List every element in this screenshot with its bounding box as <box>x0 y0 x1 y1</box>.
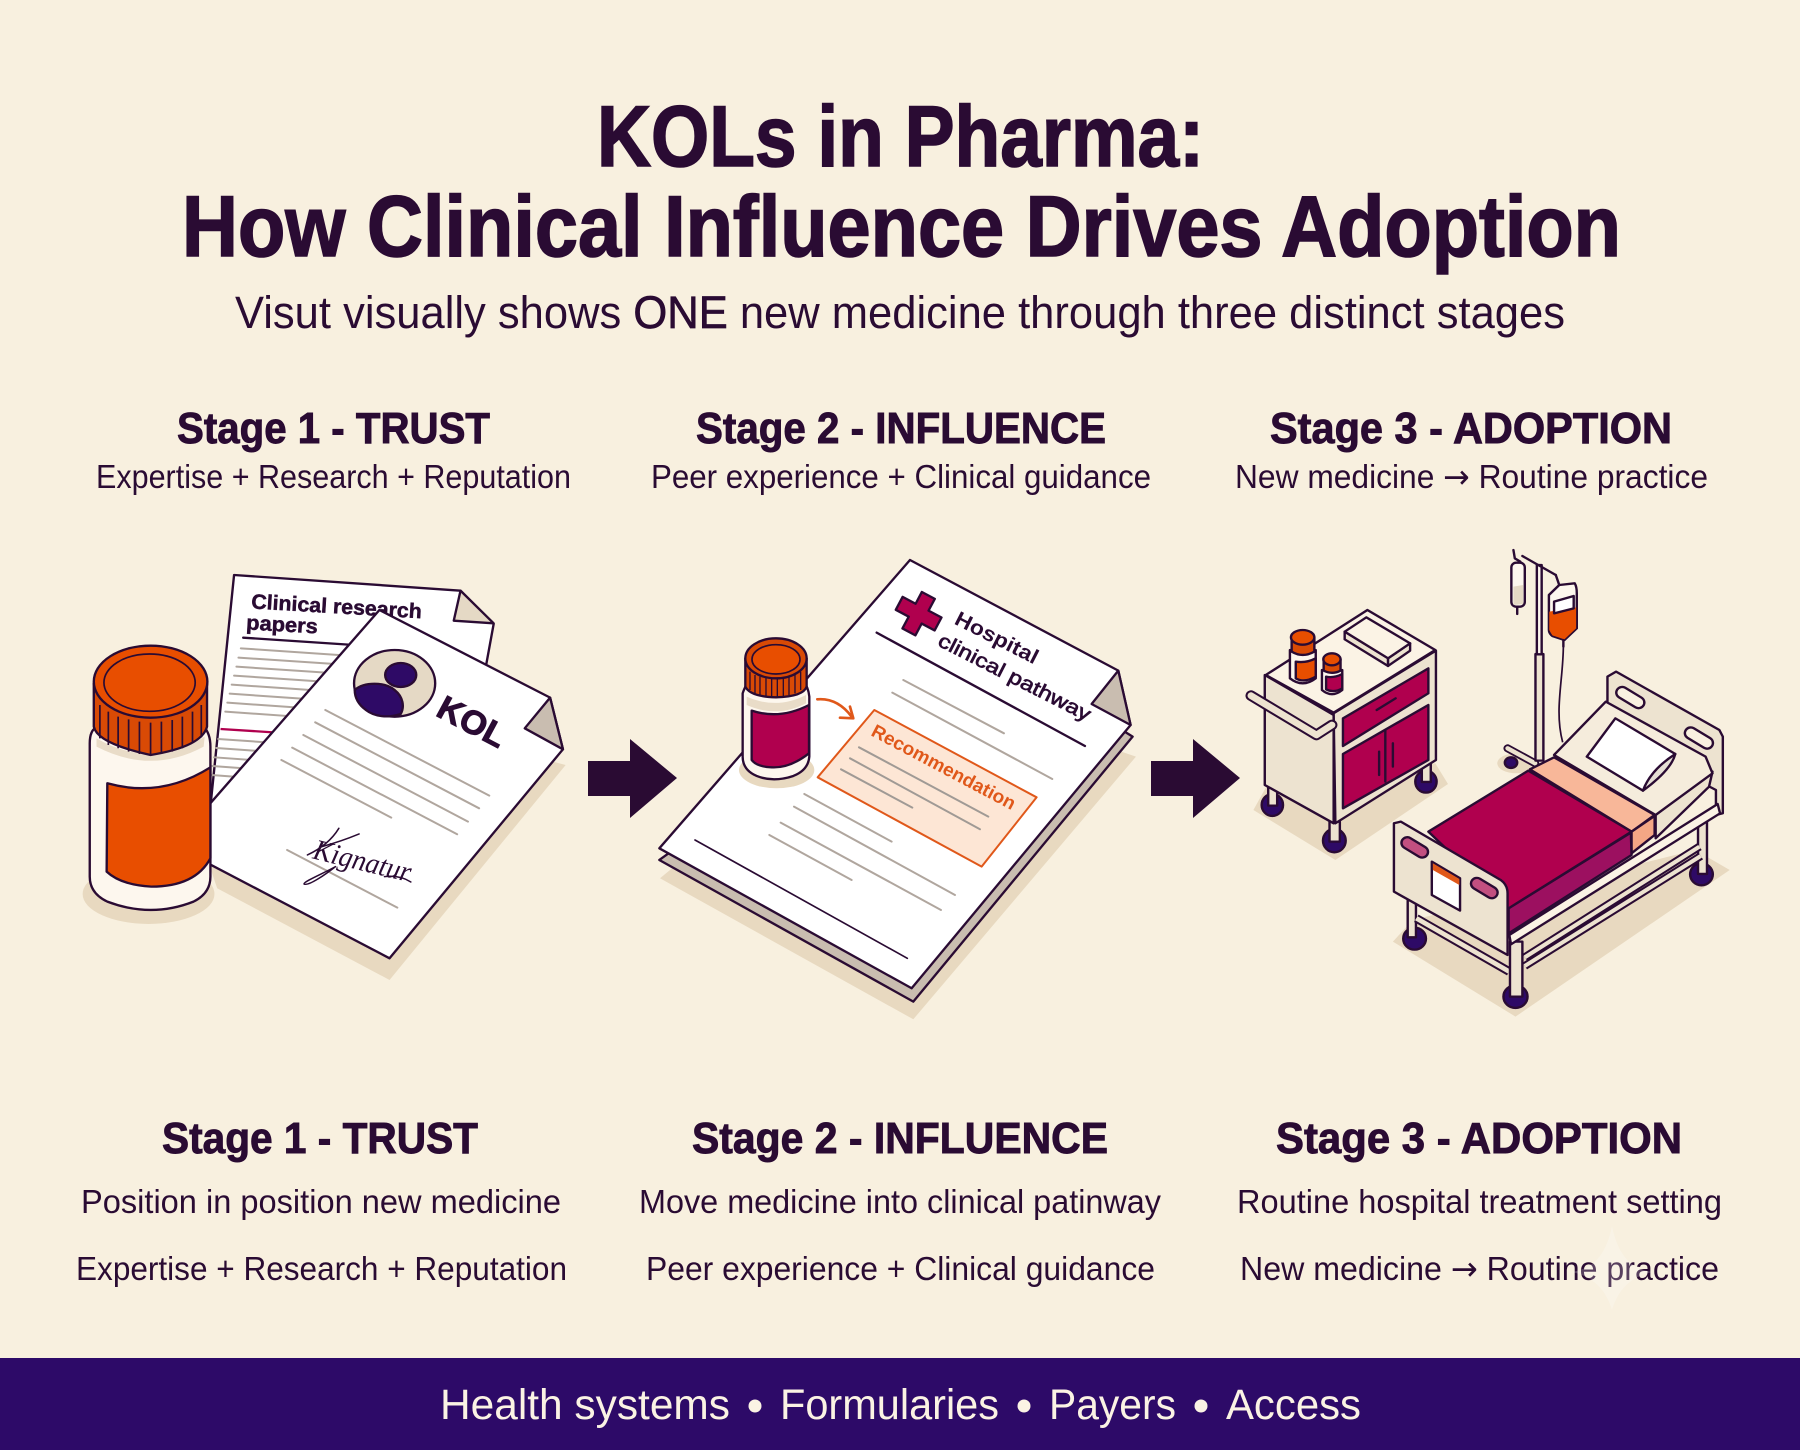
signature: Kignatur <box>309 834 415 889</box>
bottom text: stage 3: Stage 3 - ADOPTION <box>1276 1114 1682 1163</box>
medicine cart <box>1251 610 1448 860</box>
magenta blanket <box>1428 771 1632 933</box>
footer band: Health systems <box>440 1381 730 1429</box>
backrest support <box>1656 772 1712 838</box>
hospital bed <box>1393 672 1730 1017</box>
pillow <box>1587 718 1675 791</box>
top heading: stage 3: New medicine → Routine practice <box>1235 457 1708 496</box>
bottom text: stage 3 <box>1237 1114 1722 1288</box>
orange cart bottle <box>1290 630 1316 683</box>
bed shadow <box>1393 850 1730 1017</box>
illustration: stage 3 hospital ward <box>1251 550 1730 1017</box>
arrow: stage 2 to stage 3 <box>1151 739 1240 818</box>
icon: medical cross <box>890 585 948 642</box>
headboard <box>1607 672 1723 815</box>
top heading: stage 1 <box>96 404 571 495</box>
top heading: stage 1: Expertise + Research + Reputation <box>96 458 571 495</box>
bed frame rail <box>1509 804 1720 944</box>
clinical research paper <box>210 575 494 807</box>
chart card <box>1432 862 1460 911</box>
title: KOLs in Pharma: <box>597 89 1204 185</box>
IV stand <box>1497 550 1577 773</box>
IV bag: clear <box>1511 563 1525 614</box>
top heading: stage 2: Peer experience + Clinical guidance <box>651 458 1151 495</box>
arrow: into recommendation <box>817 699 853 718</box>
KOL document <box>174 610 563 958</box>
cart wheels <box>1262 757 1437 852</box>
top heading: stage 3 <box>1235 404 1708 496</box>
footer band <box>0 1358 1800 1450</box>
illustration: stage 2 hospital clinical pathway <box>659 560 1136 1019</box>
arrow: stage 1 to stage 2 <box>588 739 677 818</box>
bottom text: stage 2: Stage 2 - INFLUENCE <box>692 1114 1108 1163</box>
bottom text: stage 2: Move medicine into clinical patinway <box>639 1183 1161 1220</box>
watermark sparkle <box>1572 1226 1652 1310</box>
supply box <box>1345 617 1410 666</box>
bottom text: stage 1: Position in position new medicine <box>81 1183 561 1220</box>
footer band: Payers <box>1049 1381 1176 1429</box>
bottom text: stage 2 <box>639 1114 1161 1287</box>
title <box>182 89 1621 275</box>
magenta cart bottle <box>1322 653 1342 694</box>
bottom text: stage 2: Peer experience + Clinical guidance <box>646 1250 1155 1287</box>
footer band: Formularies <box>780 1381 999 1429</box>
top heading: stage 2 <box>651 404 1151 495</box>
IV tube <box>1559 645 1563 742</box>
bed legs and wheels <box>1403 817 1713 1008</box>
bottom text: stage 1 <box>76 1114 567 1287</box>
bottom text: stage 1: Expertise + Research + Reputation <box>76 1250 567 1287</box>
bottom text: stage 3: Routine hospital treatment setting <box>1237 1183 1722 1220</box>
footboard <box>1394 822 1508 955</box>
mattress head section <box>1554 702 1712 815</box>
document back page <box>659 727 1133 1002</box>
side rail <box>1251 696 1332 735</box>
pathway document <box>659 560 1131 988</box>
shadow <box>660 747 1136 1019</box>
recommendation box: Recommendation <box>868 720 1020 814</box>
page fold <box>525 698 563 749</box>
subtitle: Visut visually shows ONE new medicine through three distinct stages <box>235 287 1565 338</box>
IV bag: orange <box>1549 575 1577 742</box>
top heading: stage 2: Stage 2 - INFLUENCE <box>696 404 1106 453</box>
bottom text: stage 1: Stage 1 - TRUST <box>162 1114 478 1163</box>
clinical research paper: papers <box>246 611 319 638</box>
illustration: stage 1 bottle and KOL papers <box>83 575 566 980</box>
footer band: Access <box>1226 1381 1361 1429</box>
recommendation box <box>818 710 1037 867</box>
shadow under KOL paper <box>209 760 566 980</box>
pathway document: clinical pathway <box>934 630 1094 726</box>
KOL document: KOL <box>431 690 512 756</box>
bottom text: stage 3: New medicine → Routine practice <box>1240 1249 1719 1288</box>
title: How Clinical Influence Drives Adoption <box>182 179 1621 275</box>
cabinet doors <box>1343 705 1428 808</box>
clinical research paper: Clinical research <box>251 590 422 623</box>
small magenta-label bottle <box>739 638 814 788</box>
pill bottle <box>83 646 214 924</box>
bottle label <box>107 767 210 887</box>
drawer <box>1343 668 1428 746</box>
sheet band <box>1530 757 1655 853</box>
pathway document: Hospital <box>951 607 1042 669</box>
icon: KOL avatar <box>354 650 435 717</box>
top heading: stage 1: Stage 1 - TRUST <box>177 404 490 453</box>
top heading: stage 3: Stage 3 - ADOPTION <box>1270 404 1672 453</box>
